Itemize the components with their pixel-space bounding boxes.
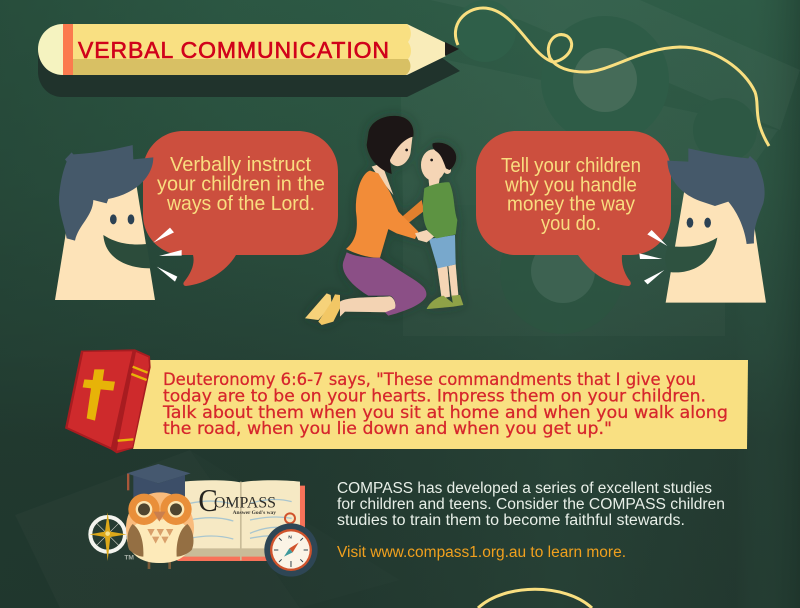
owl with cap	[126, 464, 194, 569]
icon: bible	[65, 349, 151, 453]
open book: OMPASS	[214, 494, 276, 511]
pencil squiggle line	[455, 8, 769, 146]
pocket compass: N	[288, 534, 292, 540]
scripture banner	[133, 360, 748, 449]
mother	[305, 116, 426, 325]
left bubble text: your children in the	[157, 172, 325, 196]
right speech bubble	[476, 131, 671, 286]
left bubble text: ways of the Lord.	[166, 192, 315, 215]
right talking face	[639, 148, 766, 303]
left speech bubble	[143, 131, 338, 286]
right bubble text: why you handle	[504, 174, 637, 196]
open book	[177, 480, 305, 561]
compass logo, owl, book and compass group	[89, 464, 318, 577]
child	[415, 143, 463, 309]
compass star logo: TM	[124, 555, 134, 562]
left bubble text: Verbally instruct	[170, 153, 311, 176]
open book: Answer God's way	[233, 511, 277, 516]
title pencil	[38, 24, 460, 97]
scripture text: today are to be on your hearts. Impress them on your children.	[163, 386, 706, 406]
compass description text: for children and teens. Consider the COMPASS children	[337, 496, 725, 513]
right bubble text: money the way	[507, 192, 636, 216]
left talking face	[55, 145, 182, 300]
compass star logo	[89, 512, 134, 562]
website call to action: Visit www.compass1.org.au to learn more.	[337, 544, 626, 561]
pocket compass	[264, 513, 318, 577]
right bubble text: Tell your children	[501, 154, 641, 177]
scripture text: Talk about them when you sit at home and when you walk along	[162, 403, 728, 422]
title: VERBAL COMMUNICATION	[78, 37, 389, 63]
right bubble text: you do.	[541, 212, 601, 235]
bottom squiggle line	[478, 589, 592, 608]
compass description text: COMPASS has developed a series of excellent studies	[337, 480, 712, 497]
scripture text: Deuteronomy 6:6-7 says, "These commandments that I give you	[163, 370, 696, 389]
scripture text: the road, when you lie down and when you get up."	[163, 419, 612, 438]
mother and child illustration	[305, 116, 463, 325]
open book: C	[198, 483, 218, 518]
compass description text: studies to train them to become faithful stewards.	[337, 512, 685, 529]
